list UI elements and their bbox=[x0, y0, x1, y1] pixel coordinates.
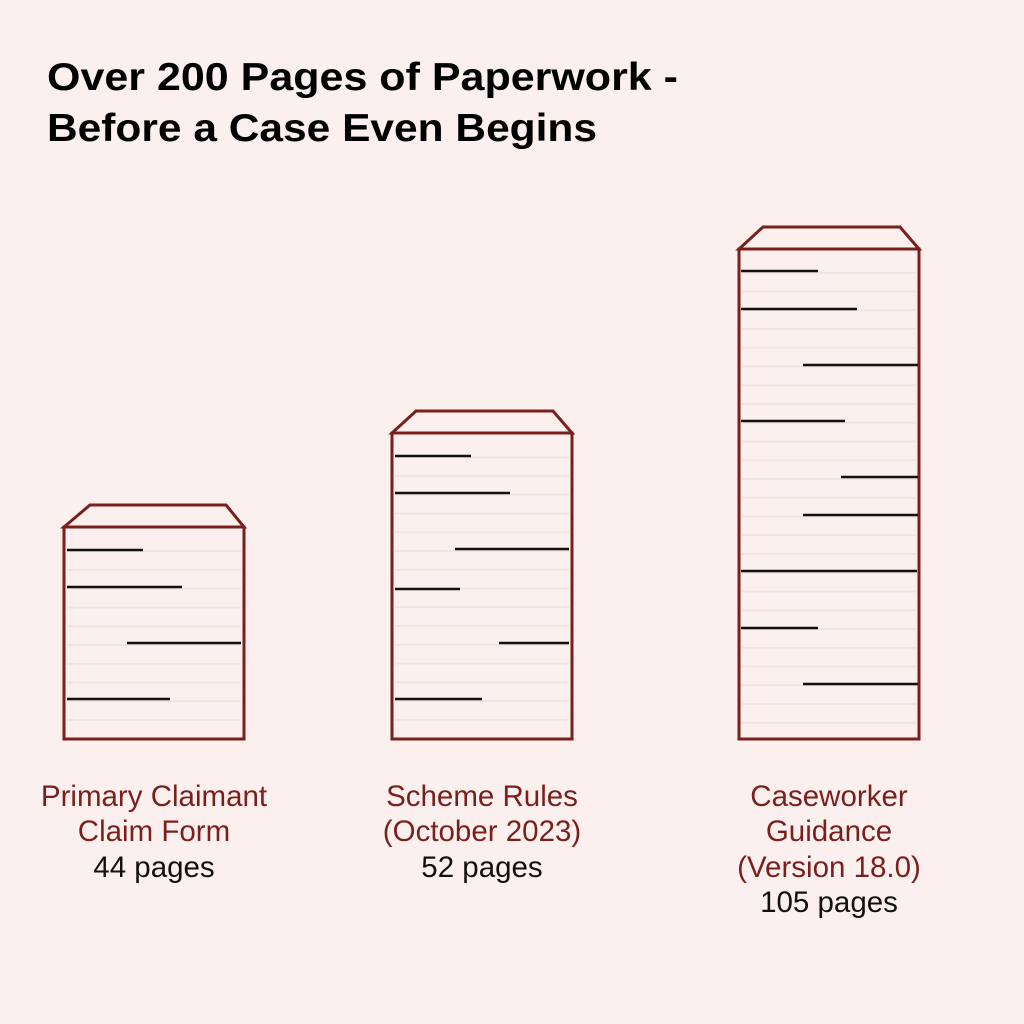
label: caseworker guidance: (Version 18.0) bbox=[737, 851, 921, 884]
stack: claim form 44 pages bbox=[64, 505, 244, 739]
stack: scheme rules 52 pages bbox=[392, 411, 572, 739]
label: caseworker guidance bbox=[737, 780, 921, 919]
label: claim form: 44 pages bbox=[93, 851, 215, 884]
label: scheme rules: 52 pages bbox=[421, 851, 543, 884]
label: scheme rules: (October 2023) bbox=[383, 815, 581, 848]
label: claim form: Claim Form bbox=[78, 815, 230, 848]
title: Before a Case Even Begins bbox=[47, 107, 597, 150]
label: claim form: Primary Claimant bbox=[41, 780, 267, 813]
label: caseworker guidance: 105 pages bbox=[760, 886, 898, 919]
label: claim form bbox=[41, 780, 267, 884]
title bbox=[47, 56, 678, 150]
title: Over 200 Pages of Paperwork - bbox=[47, 56, 678, 99]
stack: caseworker guidance 105 pages bbox=[739, 227, 919, 739]
label: caseworker guidance: Guidance bbox=[766, 815, 892, 848]
label: scheme rules: Scheme Rules bbox=[386, 780, 578, 813]
label: caseworker guidance: Caseworker bbox=[750, 780, 908, 813]
label: scheme rules bbox=[383, 780, 581, 884]
